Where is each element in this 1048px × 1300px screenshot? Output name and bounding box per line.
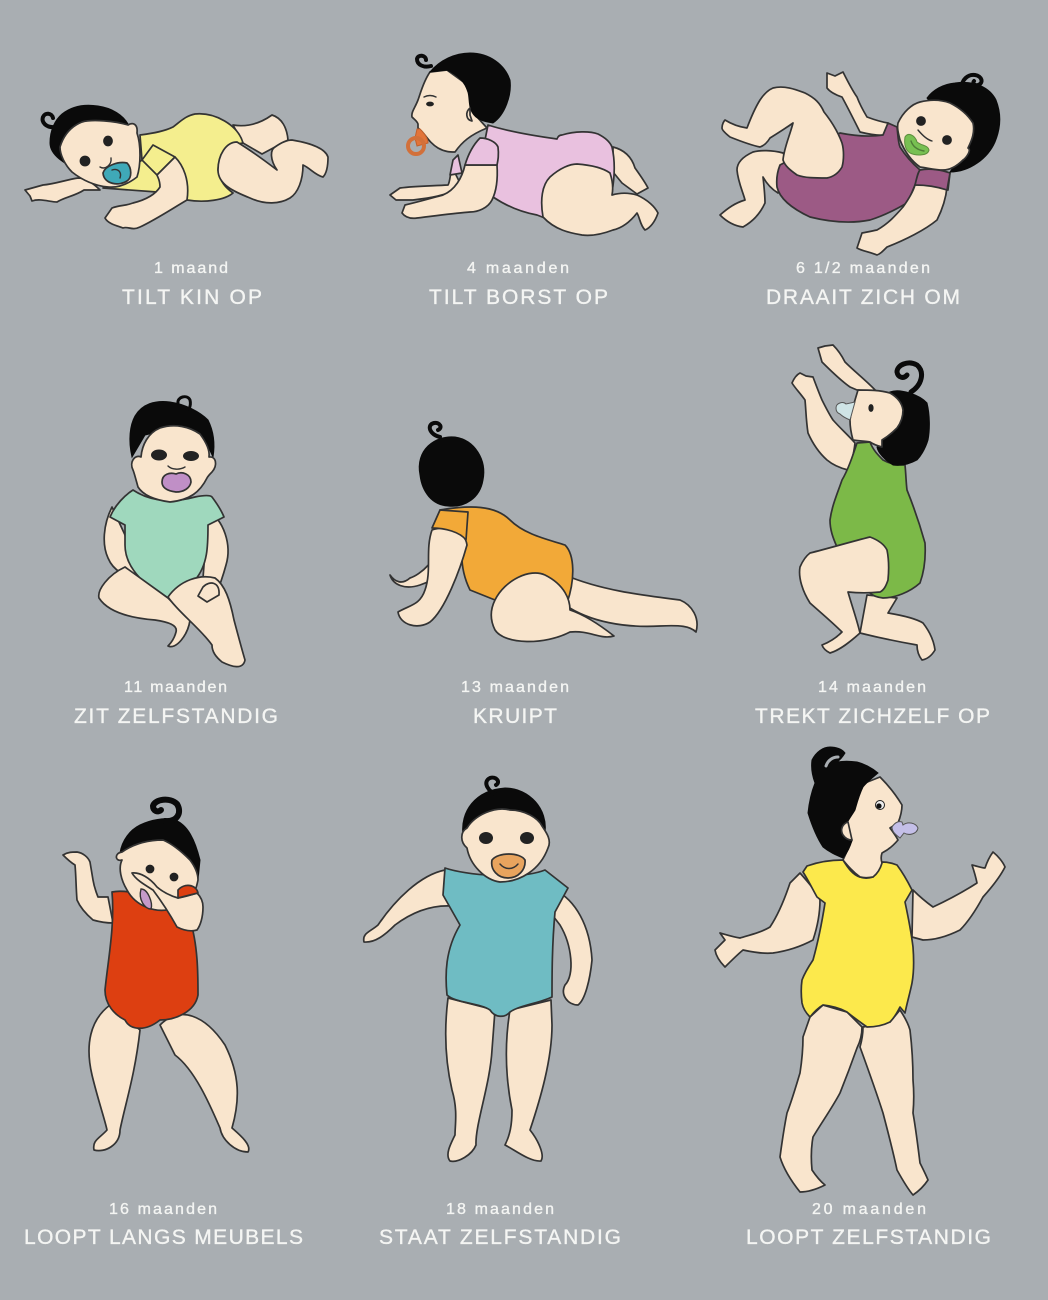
caption: 20 maanden, loopt zelfstandig: LOOPT ZELFSTANDIG: [746, 1226, 991, 1249]
head: [419, 423, 484, 506]
baby: 18 maanden, stands: [364, 778, 592, 1161]
caption: 6 1/2 maanden, draait zich om: [766, 260, 960, 309]
baby: 4 maanden, tilts chest: [390, 53, 658, 235]
baby: 13 maanden, crawls: [390, 423, 697, 642]
caption: 14 maanden, trekt zichzelf op: 14 maanden: [818, 679, 926, 696]
caption: 16 maanden, loopt langs meubels: LOOPT LANGS MEUBELS: [24, 1226, 303, 1249]
caption: 16 maanden, loopt langs meubels: 16 maanden: [109, 1201, 217, 1218]
caption: 18 maanden, staat zelfstandig: STAAT ZELFSTANDIG: [379, 1226, 621, 1249]
head: [462, 778, 549, 882]
caption: 20 maanden, loopt zelfstandig: [746, 1201, 991, 1249]
caption: 4 maanden, tilt borst op: 4 maanden: [467, 260, 569, 277]
caption: 20 maanden, loopt zelfstandig: 20 maanden: [812, 1201, 926, 1218]
caption: 16 maanden, loopt langs meubels: [24, 1201, 303, 1249]
head: [808, 747, 918, 878]
head: [836, 363, 929, 465]
head: [116, 800, 203, 931]
caption: 11 maanden, zit zelfstandig: ZIT ZELFSTANDIG: [74, 705, 278, 728]
caption: 1 maand, tilt kin op: [122, 260, 262, 309]
baby: 16 maanden, cruises: [63, 800, 249, 1152]
baby: 14 maanden, pulls up: [792, 345, 935, 660]
caption: 18 maanden, staat zelfstandig: [379, 1201, 621, 1249]
caption: 1 maand, tilt kin op: 1 maand: [154, 260, 228, 277]
head: [130, 397, 216, 502]
caption: 13 maanden, kruipt: [461, 679, 569, 728]
caption: 13 maanden, kruipt: 13 maanden: [461, 679, 569, 696]
baby: 6 1/2 maanden, rolls over: [720, 72, 1000, 255]
caption: 4 maanden, tilt borst op: TILT BORST OP: [429, 286, 608, 309]
caption: 14 maanden, trekt zichzelf op: TREKT ZICHZELF OP: [755, 705, 990, 728]
caption: 13 maanden, kruipt: KRUIPT: [473, 705, 557, 728]
caption: 11 maanden, zit zelfstandig: 11 maanden: [124, 679, 227, 696]
head: [43, 105, 140, 187]
head: [408, 53, 510, 154]
baby: 11 maanden, sits: [99, 397, 245, 667]
caption: 14 maanden, trekt zichzelf op: [755, 679, 990, 728]
caption: 4 maanden, tilt borst op: [429, 260, 608, 309]
caption: 1 maand, tilt kin op: TILT KIN OP: [122, 286, 262, 309]
head: [898, 75, 1000, 172]
baby: 20 maanden, walks: [715, 747, 1005, 1195]
caption: 18 maanden, staat zelfstandig: 18 maanden: [446, 1201, 554, 1218]
caption: 11 maanden, zit zelfstandig: [74, 679, 278, 728]
caption: 6 1/2 maanden, draait zich om: DRAAIT ZICH OM: [766, 286, 960, 309]
baby: 1 maand, tilts chin: [25, 105, 328, 229]
caption: 6 1/2 maanden, draait zich om: 6 1/2 maanden: [796, 260, 930, 277]
